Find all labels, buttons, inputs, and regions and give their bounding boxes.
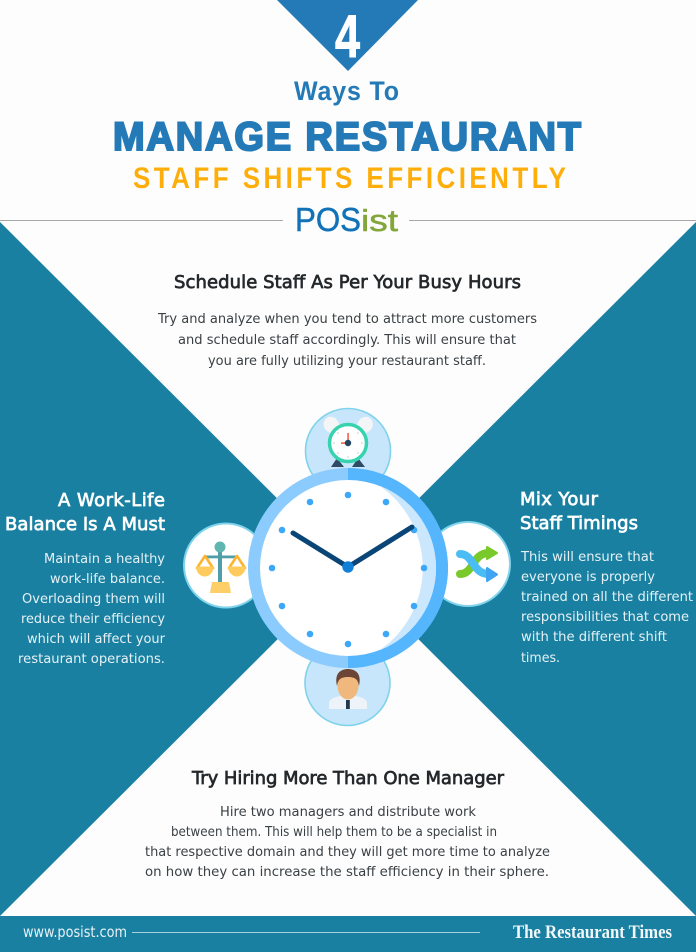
panel: mix staff timings: with the different shift [521,629,667,645]
logo: POSist: POS [295,201,361,238]
panel: work-life balance: A Work-Life [58,490,165,511]
panel: schedule staff: and schedule staff accordingly. This will ensure that [178,332,516,348]
panel: mix staff timings: responsibilities that come [521,609,689,625]
panel: hiring managers [145,768,550,880]
panel: work-life balance: reduce their efficiency [21,611,165,627]
clock [248,468,448,668]
logo: POSist: ist [361,203,398,238]
panel: work-life balance: Overloading them will [22,591,165,607]
title: Ways To [294,75,399,106]
panel: work-life balance: Balance Is A Must [5,514,165,535]
panel: work-life balance: restaurant operations. [18,651,165,667]
icon: shuffle arrows [426,522,510,606]
title: MANAGE RESTAURANT [113,115,581,159]
panel: schedule staff: Schedule Staff As Per Your Busy Hours [174,272,521,293]
panel: right teal triangle [348,222,696,916]
panel: work-life balance: Maintain a healthy [44,551,165,567]
panel: schedule staff: you are fully utilizing your restaurant staff. [208,353,486,369]
panel: hiring managers: Hire two managers and distribute work [220,804,476,820]
panel: left teal triangle [0,222,348,916]
panel: hiring managers: between them. This will help them to be a specialist in [171,824,497,840]
icon: alarm clock [306,408,390,494]
panel: hiring managers: on how they can increase the staff efficiency in their sphere. [145,864,549,880]
panel: mix staff timings: This will ensure that [520,549,654,565]
panel: mix staff timings: Mix Your [520,489,599,510]
footer bar: The Restaurant Times [513,922,672,943]
panel: hiring managers: that respective domain and they will get more time to analyze [145,844,550,860]
panel: schedule staff: Try and analyze when you tend to attract more customers [157,311,537,327]
number badge: 4 [335,3,360,70]
panel: mix staff timings: everyone is properly [521,569,655,585]
panel: work-life balance: which will affect your [27,631,165,647]
panel: mix staff timings [520,489,693,666]
clock: hands [293,527,412,567]
footer bar: www.posist.com [23,923,127,941]
number badge [277,0,418,71]
footer bar [0,916,696,952]
title: STAFF SHIFTS EFFICIENTLY [133,161,566,194]
panel: mix staff timings: Staff Timings [520,513,638,534]
icon: manager [305,640,390,726]
panel: mix staff timings: trained on all the different [521,589,693,605]
icon: scales [184,524,268,608]
panel: work-life balance [5,490,165,667]
panel: work-life balance: work-life balance. [50,571,165,587]
logo: POSist [0,201,696,238]
clock: hour markers [269,492,427,647]
title [113,75,581,194]
panel: hiring managers: Try Hiring More Than One Manager [191,768,505,789]
panel: mix staff timings: times. [521,650,560,666]
panel: schedule staff [157,272,537,369]
